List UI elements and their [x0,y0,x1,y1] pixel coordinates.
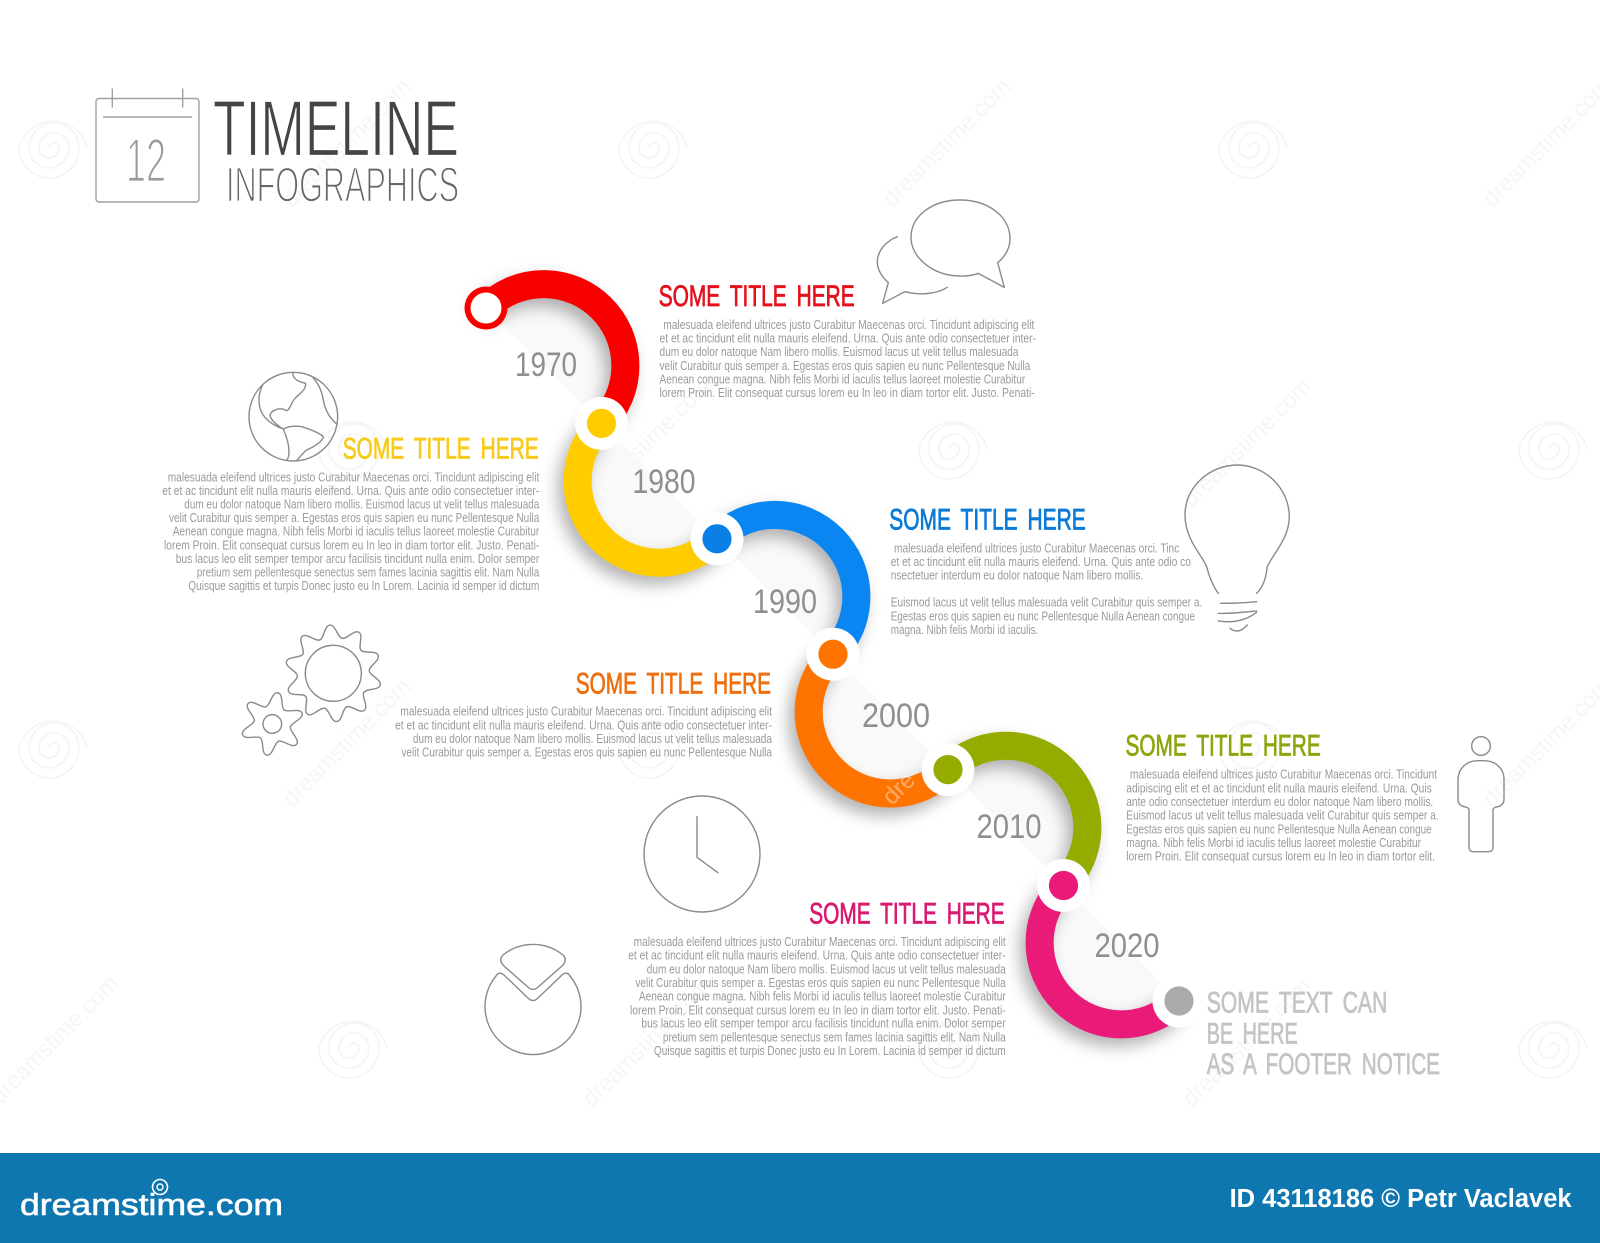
icon: person [1458,737,1504,852]
text block red: lorem Proin. Elit consequat cursus lorem eu In leo in diam tortor elit. Justo. Penati- [660,386,1035,400]
text block yellow: pretium sem pellentesque senectus sem fames lacinia sagittis elit. Nam Nulla [197,566,539,580]
title: TIMELINE [213,84,459,173]
text block orange: SOME TITLE HERE [576,667,771,700]
icon: light bulb [1185,465,1289,631]
segment 1970 red [480,284,625,431]
watermark pattern: dreamstime.com [1177,373,1316,512]
text block yellow: SOME TITLE HERE [343,433,539,466]
footer notice: SOME TEXT CAN [1207,987,1387,1020]
text block pink: dum eu dolor natoque Nam libero mollis. Euismod lacus ut velit tellus malesuada [647,962,1006,976]
year labels: 2000 [862,697,930,735]
text block yellow: Quisque sagittis et turpis Donec justo eu In Lorem. Lacinia id semper id dictum [188,579,539,593]
icon: globe [249,372,338,461]
text block blue: malesuada eleifend ultrices justo Curabitur Maecenas orci. Tinc [894,541,1179,555]
text block green: magna. Nibh felis Morbi id iaculis tellus laoreet molestie Curabitur [1126,836,1421,850]
text block yellow [162,433,540,593]
year labels: 1970 [515,346,577,384]
node pink [1037,859,1090,912]
text block blue: SOME TITLE HERE [889,503,1086,536]
footer notice: BE HERE [1207,1017,1298,1050]
text block green: ante odio consectetuer interdum eu dolor natoque Nam libero mollis. [1126,795,1433,809]
text block blue: nsectetuer interdum eu dolor natoque Nam libero mollis. [891,569,1143,583]
text block pink: SOME TITLE HERE [809,897,1005,930]
text block pink: et et ac tincidunt elit nulla mauris eleifend. Urna. Quis ante odio consectetuer inter- [628,949,1006,963]
text block green: malesuada eleifend ultrices justo Curabitur Maecenas orci. Tincidunt [1130,768,1437,782]
node blue [690,512,744,565]
year labels: 2010 [976,808,1042,846]
image credit: ID 43118186 © Petr Vaclavek [1230,1185,1572,1213]
text block pink: Aenean congue magna. Nibh felis Morbi id iaculis tellus laoreet molestie Curabitur [639,990,1006,1004]
text block red: et et ac tincidunt elit nulla mauris eleifend. Urna. Quis ante odio consectetuer inter- [660,332,1036,346]
text block yellow: dum eu dolor natoque Nam libero mollis. Euismod lacus ut velit tellus malesuada [184,498,539,512]
text block red [659,280,1036,400]
text block red: dum eu dolor natoque Nam libero mollis. Euismod lacus ut velit tellus malesuada [660,345,1019,359]
text block pink: velit Curabitur quis semper a. Egestas eros quis sapien eu nunc Pellentesque Nulla [635,976,1006,990]
text block green [1126,730,1439,864]
watermark pattern: dreamstime.com [577,973,716,1112]
text block orange: dum eu dolor natoque Nam libero mollis. Euismod lacus ut velit tellus malesuada [413,732,772,746]
text block orange [395,667,772,760]
text block orange: velit Curabitur quis semper a. Egestas eros quis sapien eu nunc Pellentesque Nulla [401,746,772,760]
text block blue: Euismod lacus ut velit tellus malesuada velit Curabitur quis semper a. [891,596,1202,610]
text block orange: et et ac tincidunt elit nulla mauris eleifend. Urna. Quis ante odio consectetuer inter- [395,718,772,732]
segment 2000 orange: dre [877,767,921,810]
icon: clock [644,796,760,912]
icon: gears [235,622,386,761]
text block red: SOME TITLE HERE [659,280,855,313]
text block green: SOME TITLE HERE [1126,730,1321,763]
text block green: lorem Proin. Elit consequat cursus lorem eu In leo in diam tortor elit. [1126,850,1435,864]
text block green: adipiscing elit et et ac tincidunt elit nulla mauris eleifend. Urna. Quis [1126,781,1432,795]
text block pink: Quisque sagittis et turpis Donec justo eu In Lorem. Lacinia id semper id dictum [654,1044,1006,1058]
year labels: 2020 [1094,927,1160,965]
text block red: malesuada eleifend ultrices justo Curabitur Maecenas orci. Tincidunt adipiscing elit [663,318,1035,332]
icon: calendar [96,88,199,202]
end node gray [1152,974,1206,1028]
icon: speech bubbles [877,200,1010,303]
segment 1980 yellow [572,423,717,571]
segment 2000 orange [803,654,948,810]
text block yellow: Aenean congue magna. Nibh felis Morbi id iaculis tellus laoreet molestie Curabitur [173,525,539,539]
start marker red ring [464,286,508,330]
watermark pattern: dreamstime.com [277,73,416,212]
segment 2020 pink [1034,885,1179,1032]
node orange [806,628,860,681]
text block pink: pretium sem pellentesque senectus sem fames lacinia sagittis elit. Nam Nulla [663,1030,1006,1044]
text block blue [889,503,1202,637]
node yellow [575,397,628,450]
text block green: Egestas eros quis sapien eu nunc Pellentesque Nulla Aenean congue [1126,822,1432,836]
footer notice: AS A FOOTER NOTICE [1207,1048,1440,1081]
text block blue: et et ac tincidunt elit nulla mauris eleifend. Urna. Quis ante odio co [891,555,1191,569]
watermark pattern: dreamstime.com [877,73,1016,212]
winding timeline [464,284,1206,1032]
text block blue: Egestas eros quis sapien eu nunc Pellentesque Nulla Aenean congue [891,609,1195,623]
node green [922,743,974,796]
text block green: Euismod lacus ut velit tellus malesuada velit Curabitur quis semper a. [1126,809,1439,823]
title: INFOGRAPHICS [226,159,459,213]
text block orange: malesuada eleifend ultrices justo Curabitur Maecenas orci. Tincidunt adipiscing elit [400,705,772,719]
icon: pie chart [485,944,581,1055]
title [213,84,459,213]
text block yellow: velit Curabitur quis semper a. Egestas eros quis sapien eu nunc Pellentesque Nulla [169,511,539,525]
logo: dreamstime.com [20,1187,283,1222]
text block blue: magna. Nibh felis Morbi id iaculis. [891,623,1038,637]
footer notice [1207,987,1440,1081]
segment 2010 green [942,746,1087,893]
text block yellow: et et ac tincidunt elit nulla mauris eleifend. Urna. Quis ante odio consectetuer inter- [162,484,539,498]
text block red: velit Curabitur quis semper a. Egestas eros quis sapien eu nunc Pellentesque Nulla [660,359,1030,373]
segment 1990 blue [711,515,856,662]
year labels: 1980 [632,463,696,501]
watermark pattern: dreamstime.com [277,673,416,812]
text block red: Aenean congue magna. Nibh felis Morbi id iaculis tellus laoreet molestie Curabitur [660,372,1025,386]
watermark pattern: dreamstime.com [577,373,716,512]
text block pink: malesuada eleifend ultrices justo Curabitur Maecenas orci. Tincidunt adipiscing elit [634,935,1006,949]
bottom bar [0,1153,1600,1243]
text block pink: lorem Proin. Elit consequat cursus lorem eu In leo in diam tortor elit. Justo. Penati- [630,1003,1006,1017]
text block yellow: malesuada eleifend ultrices justo Curabitur Maecenas orci. Tincidunt adipiscing elit [168,470,540,484]
text block yellow: lorem Proin. Elit consequat cursus lorem eu In leo in diam tortor elit. Justo. Penati- [164,538,539,552]
watermark pattern: dreamstime.com [1177,973,1316,1112]
text block pink [628,897,1006,1058]
year labels: 1990 [753,583,817,621]
text block pink: bus lacus leo elit semper tempor arcu facilisis tincidunt nulla enim. Dolor semper [641,1017,1006,1031]
icon: calendar: 12 [126,126,166,194]
year labels [515,346,1160,965]
text block yellow: bus lacus leo elit semper tempor arcu facilisis tincidunt nulla enim. Dolor semper [176,552,539,566]
